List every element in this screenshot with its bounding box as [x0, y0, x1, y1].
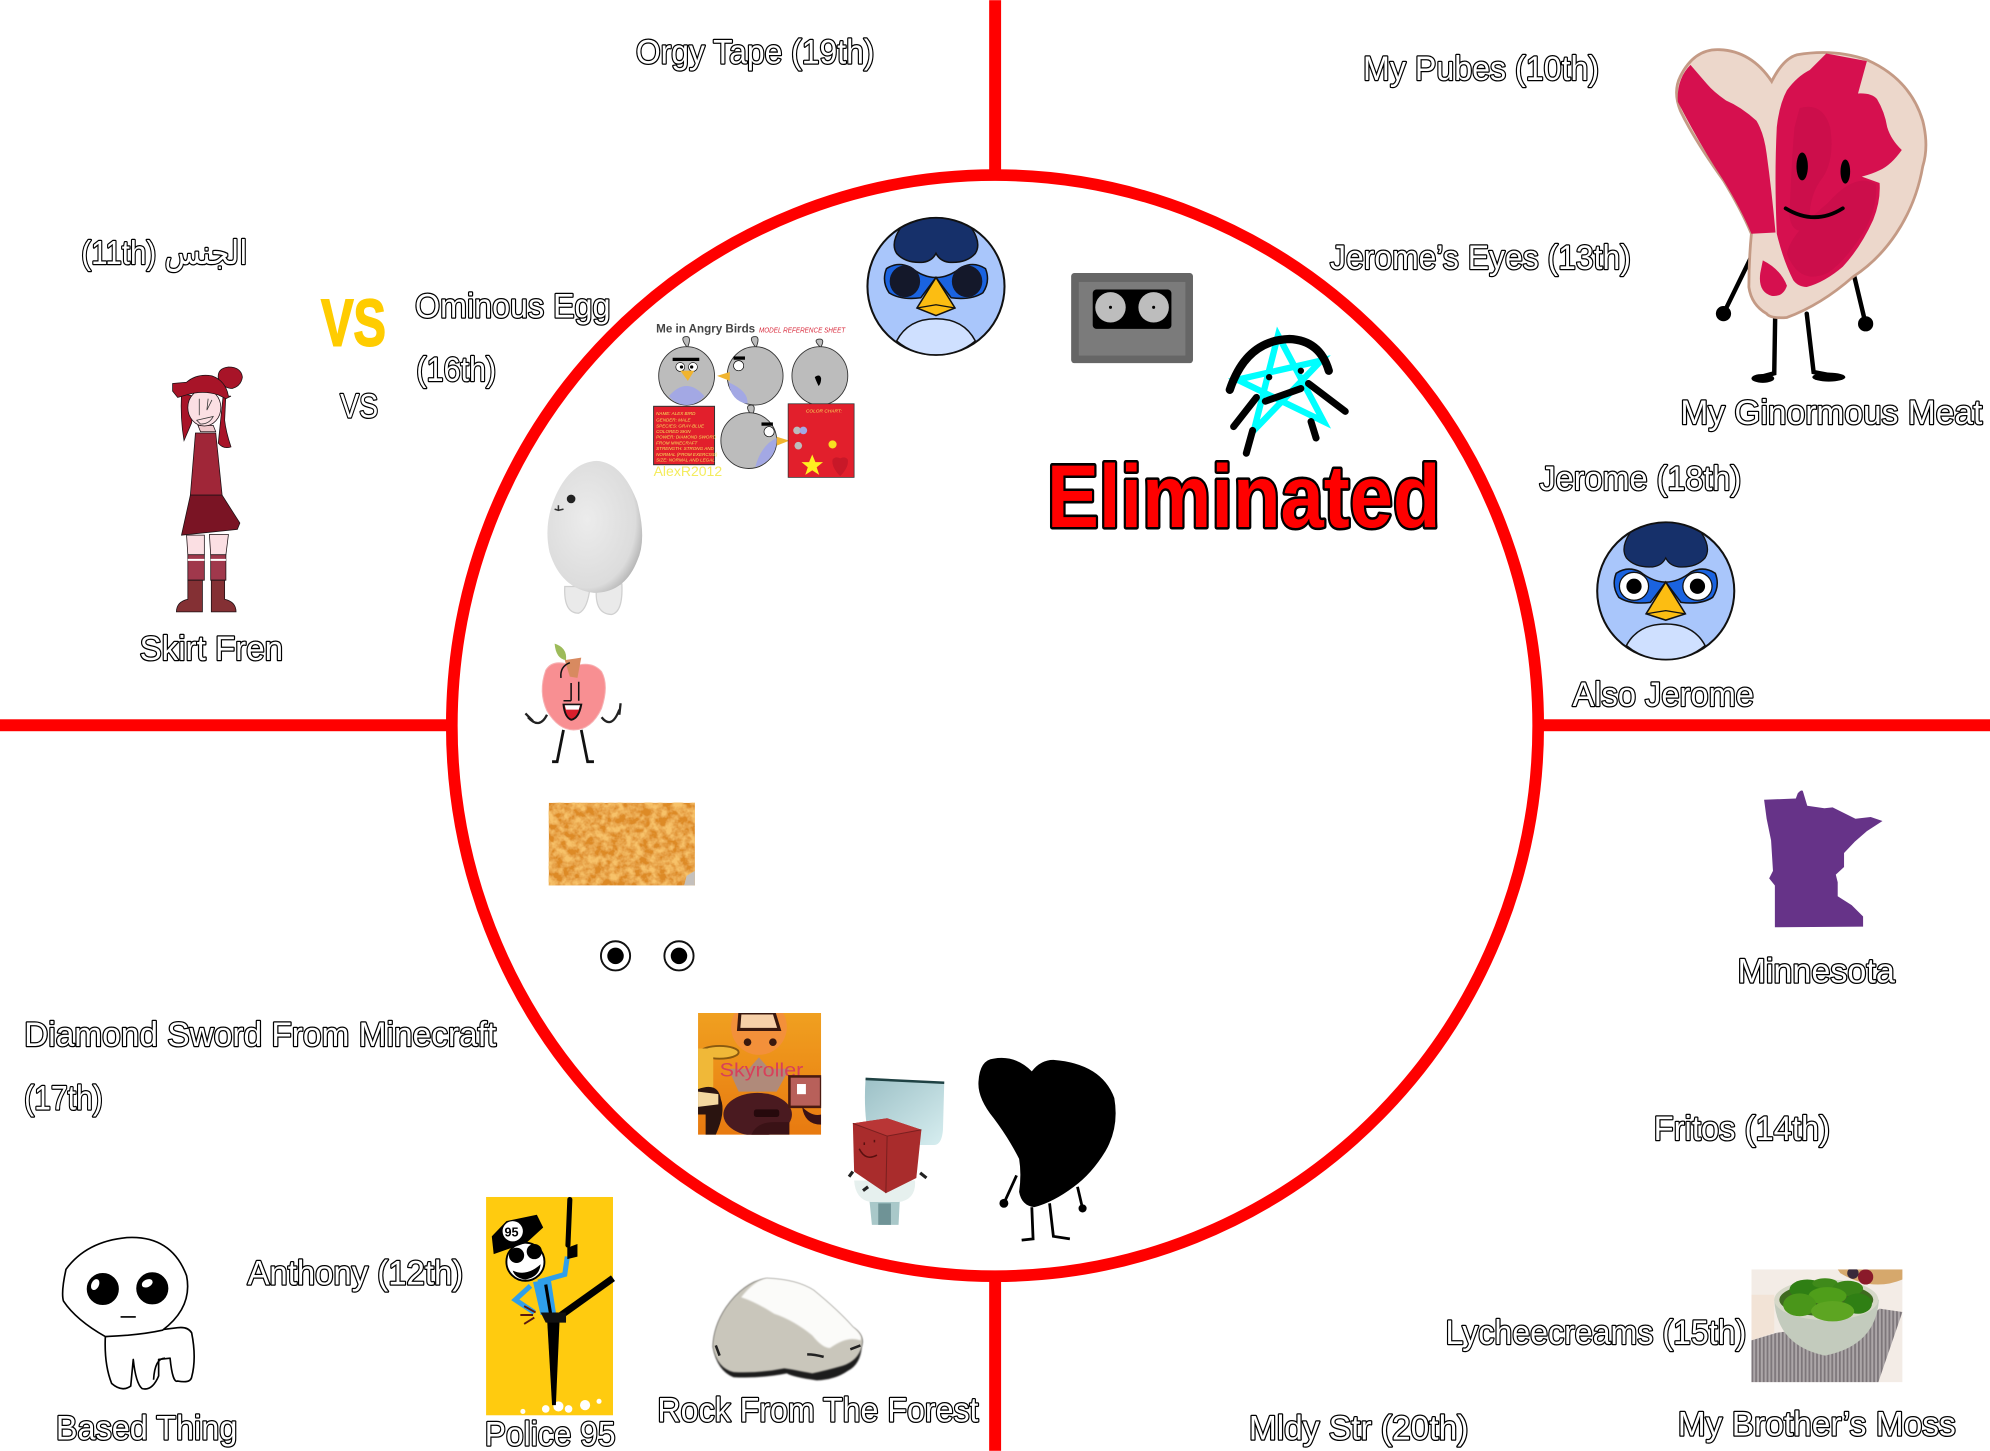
icon: angry birds model reference sheet: NAME: ALEX BIRD — [656, 411, 696, 416]
label: Arabic name 11th: (11th) الجنس — [81, 234, 247, 272]
icon: apple character — [525, 644, 621, 762]
icon: eliminated blue bird with dark eyes — [867, 218, 1005, 355]
icon: cyan star doodle — [1230, 335, 1345, 453]
label: My Brother's Moss: My Brother’s Moss — [1678, 1406, 1956, 1444]
label: Jerome: Jerome (18th) — [1539, 460, 1741, 498]
icon: Skyroller game art: Skyroller — [720, 1060, 804, 1081]
icon: angry birds model reference sheet: GENDER: MALE — [656, 418, 691, 423]
icon: angry birds model reference sheet: SIZE: NORMAL AND LEGAL — [656, 458, 715, 463]
icon: red cube on toilet — [849, 1079, 944, 1225]
Eliminated heading: Eliminated — [1047, 447, 1440, 546]
icon: Skirt Fren character — [173, 367, 242, 612]
label: 17th: (17th) — [24, 1079, 103, 1117]
icon: angry birds model reference sheet: MODEL REFERENCE SHEET — [759, 327, 846, 335]
icon: Skyroller game art — [698, 1013, 822, 1135]
label: Minnesota: Minnesota — [1737, 952, 1896, 990]
yellow VS: VS — [321, 285, 386, 359]
icon: My Ginormous Meat character — [1677, 50, 1926, 383]
icon: Rock From The Forest — [713, 1278, 863, 1380]
icon: angry birds model reference sheet: FROM MINECRAFT — [656, 440, 699, 445]
icon: bowl of moss photo — [1751, 1267, 1902, 1382]
label: Fritos: Fritos (14th) — [1654, 1110, 1830, 1148]
icon: angry birds model reference sheet: SPECIES: GRAY-BLUE — [656, 423, 705, 428]
icon: Fritos chips photo — [549, 803, 695, 885]
icon: angry birds model reference sheet: STRENGTH: STRONG AND — [656, 446, 715, 451]
label: My Ginormous Meat: My Ginormous Meat — [1680, 394, 1983, 432]
label: Jerome's Eyes: Jerome’s Eyes (13th) — [1330, 239, 1631, 277]
label: Diamond Sword From Minecraft: Diamond Sword From Minecraft — [24, 1016, 497, 1054]
icon: angry birds model reference sheet: AlexR2012 — [654, 463, 722, 479]
label: Rock From The Forest: Rock From The Forest — [657, 1392, 979, 1430]
icon: Police 95 poster: 95 — [504, 1225, 519, 1239]
icon: Based Thing doodle — [63, 1237, 194, 1389]
label: My Pubes: My Pubes (10th) — [1363, 50, 1599, 88]
icon: Police 95 poster — [486, 1197, 613, 1415]
icon: angry birds model reference sheet: COLORED SKIN — [656, 429, 691, 434]
label: Also Jerome: Also Jerome — [1572, 676, 1754, 714]
icon: angry birds model reference sheet: NORMAL (FROM EXERCISE) — [656, 452, 718, 457]
icon: black heart silhouette Mldy Str — [978, 1058, 1116, 1240]
icon: Also Jerome blue bird with open eyes — [1597, 522, 1734, 660]
icon: Jerome's Eyes pair — [601, 941, 694, 970]
icon: angry birds model reference sheet — [654, 323, 854, 479]
icon: Minnesota state silhouette — [1764, 791, 1883, 927]
icon: angry birds model reference sheet: POWER: DIAMOND SWORD — [656, 435, 717, 440]
label: Lycheecreams: Lycheecreams (15th) — [1446, 1314, 1746, 1352]
icon: angry birds model reference sheet: Me in Angry Birds — [656, 323, 755, 336]
label: Skirt Fren: Skirt Fren — [140, 630, 283, 668]
label: Ominous Egg: Ominous Egg — [415, 287, 610, 325]
label: Based Thing: Based Thing — [56, 1409, 237, 1447]
icon: Ominous Egg plush — [547, 461, 642, 614]
label: Mldy Str: Mldy Str (20th) — [1249, 1409, 1468, 1447]
label: 16th: (16th) — [416, 351, 496, 389]
outlined VS: VS — [340, 388, 378, 426]
icon: Orgy Tape cassette — [1071, 273, 1193, 363]
label: Orgy Tape: Orgy Tape (19th) — [636, 34, 874, 72]
label: Anthony: Anthony (12th) — [247, 1255, 463, 1293]
icon: angry birds model reference sheet: COLOR CHART: — [806, 409, 842, 415]
